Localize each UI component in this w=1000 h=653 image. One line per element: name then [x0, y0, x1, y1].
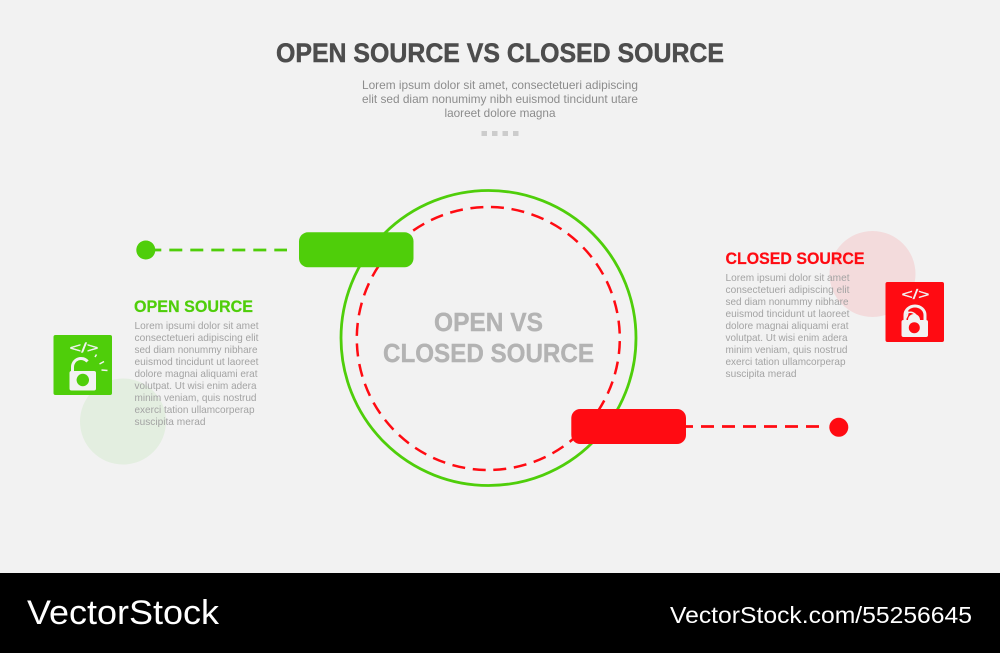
subtitle text block [362, 78, 638, 120]
icon: open padlock with code tag: </> [70, 340, 98, 356]
open source body text: suscipita merad [134, 417, 206, 428]
open source body text: euismod tincidunt ut laoreet [134, 357, 259, 368]
open source body text: dolore magnai aliquami erat [134, 369, 258, 380]
closed source body text: exerci tation ullamcorperap [726, 357, 846, 368]
subtitle text block: Lorem ipsum dolor sit amet, consectetueri adipiscing [362, 78, 638, 92]
center label: CLOSED SOURCE [383, 338, 594, 368]
title: OPEN SOURCE VS CLOSED SOURCE [276, 38, 724, 68]
decorative circle: open source [80, 378, 166, 464]
open source body text: sed diam nonummy nibhare [134, 345, 258, 356]
closed source body text: Lorem ipsumi dolor sit amet [726, 273, 850, 284]
green pill [299, 232, 414, 267]
closed source body text: dolore magnai aliquami erat [726, 321, 849, 332]
open source body text: exerci tation ullamcorperap [134, 405, 255, 416]
subtitle text block: elit sed diam nonumimy nibh euismod tincidunt utare [362, 92, 638, 106]
red connector: dashed line and dot [680, 418, 848, 437]
closed source body text: euismod tincidunt ut laoreet [726, 309, 850, 320]
open source body text: Lorem ipsumi dolor sit amet [134, 321, 259, 332]
closed source body text: volutpat. Ut wisi enim adera [726, 333, 848, 344]
footer image url: VectorStock.com/55256645 [670, 602, 972, 628]
decorative circle: closed source [830, 231, 916, 317]
center label [383, 307, 594, 368]
footer bar [0, 573, 1000, 653]
open source body text: consectetueri adipiscing elit [134, 333, 259, 344]
open source heading: OPEN SOURCE [134, 297, 253, 316]
green connector: dot and dashed line [136, 240, 287, 260]
subtitle text block: laoreet dolore magna [444, 106, 556, 120]
central ring diagram [341, 190, 636, 486]
closed source heading: CLOSED SOURCE [726, 249, 864, 268]
closed source body text: minim veniam, quis nostrud [726, 345, 848, 356]
icon: open padlock with code tag [54, 335, 112, 395]
center label: OPEN VS [434, 307, 543, 337]
closed source body text: sed diam nonummy nibhare [726, 297, 849, 308]
open source body text: volutpat. Ut wisi enim adera [134, 381, 257, 392]
panel: closed source [726, 249, 864, 380]
footer brand: VectorStock [27, 594, 220, 632]
icon: closed padlock with code tag: </> [902, 286, 930, 302]
open source body text: minim veniam, quis nostrud [134, 393, 257, 404]
title pagination dots [482, 131, 518, 136]
closed source body text [726, 273, 850, 380]
closed source body text: consectetueri adipiscing elit [726, 285, 850, 296]
red pill [571, 409, 686, 444]
panel: open source [134, 297, 259, 428]
closed source body text: suscipita merad [726, 369, 797, 380]
open source body text [134, 321, 259, 428]
icon: closed padlock with code tag [886, 282, 944, 342]
